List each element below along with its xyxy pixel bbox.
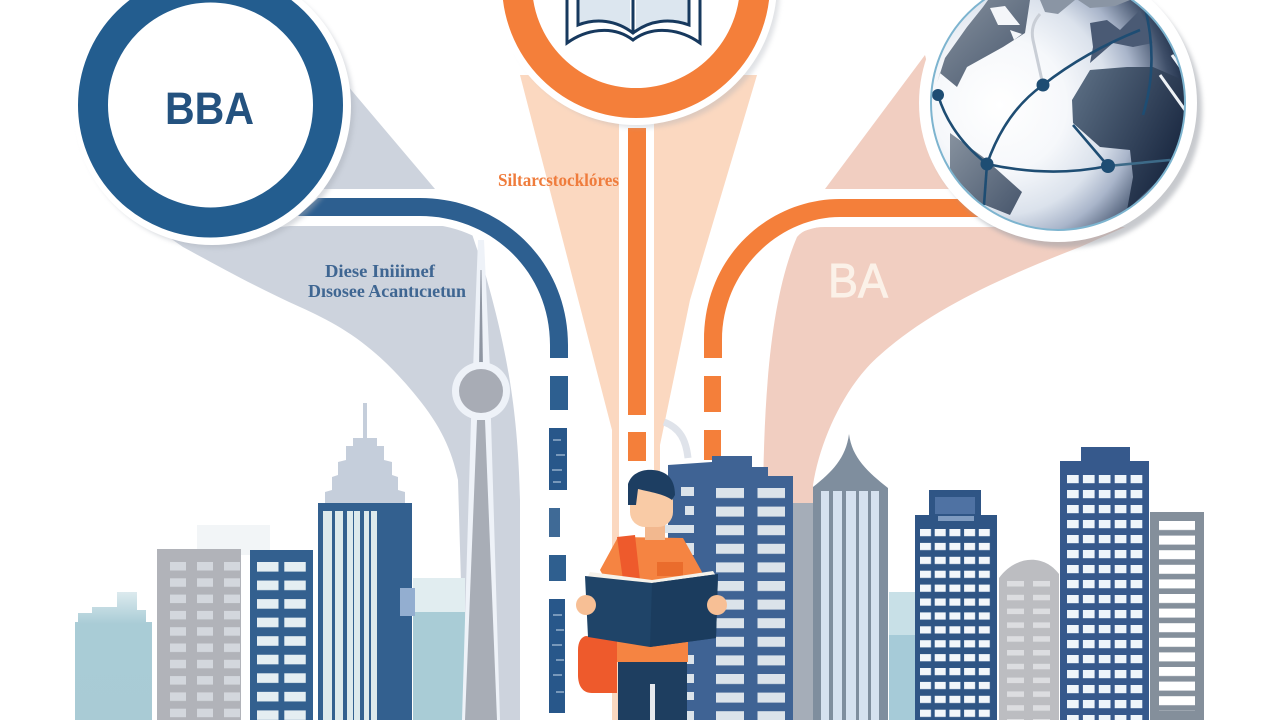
trousers	[618, 662, 687, 720]
building: striped skyscraper	[318, 403, 415, 720]
text: orange label: Siltarcstocklóres	[498, 170, 619, 190]
circle: book	[495, 0, 780, 128]
text: blue label: Diese Iniiimef	[325, 261, 436, 281]
icon: open book	[567, 0, 700, 43]
building: navy five-column	[915, 490, 997, 720]
building: grey left	[157, 549, 241, 720]
strap	[617, 535, 640, 580]
book	[587, 571, 716, 585]
building: narrow grey and spire tower	[793, 434, 888, 720]
panel: pink funnel from globe circle	[763, 55, 1125, 520]
text: blue label: Dısosee Acantıcıetun	[308, 281, 466, 301]
panel: peach funnel from book circle	[520, 75, 757, 720]
background skyline: pale teal blocks	[75, 525, 916, 720]
building: centre navy tower	[664, 456, 793, 720]
panel: grey funnel from BBA circle	[170, 85, 520, 720]
head	[630, 486, 673, 527]
navy curved connector	[290, 198, 568, 720]
text: BA: BA	[828, 255, 888, 308]
person reading book	[576, 470, 727, 720]
tower	[452, 240, 510, 720]
orange curved connector	[664, 199, 1000, 470]
torso	[600, 537, 702, 662]
label: BBA: BBA	[165, 83, 254, 134]
backpack	[578, 636, 617, 693]
network lines	[938, 0, 1170, 205]
hair	[628, 470, 675, 505]
circle: BBA	[73, 0, 354, 248]
building: rounded grey	[999, 560, 1059, 720]
building: navy left	[250, 550, 313, 720]
circle: globe with network	[919, 0, 1202, 248]
building: right grey	[1150, 512, 1204, 720]
neck	[645, 520, 665, 540]
text: blue label	[308, 261, 466, 301]
hands	[576, 595, 596, 615]
building: tall navy	[1060, 447, 1149, 720]
orange centre connector	[619, 120, 654, 720]
